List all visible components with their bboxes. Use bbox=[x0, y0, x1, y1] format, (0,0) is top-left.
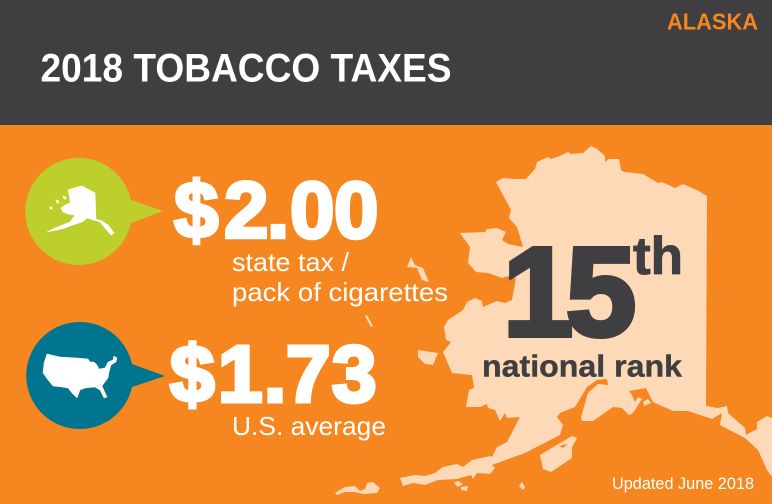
map: Alaska with rank bbox=[335, 146, 772, 495]
Alaska mainland bbox=[400, 146, 772, 486]
icon: Alaska silhouette bbox=[47, 186, 114, 235]
state tax caption: pack of cigarettes bbox=[232, 277, 448, 307]
state tax amount: $2.00 bbox=[174, 166, 378, 254]
icon: teal bubble bbox=[26, 322, 165, 429]
US average callout bbox=[26, 322, 386, 441]
rank label: national rank bbox=[482, 348, 683, 384]
state tax caption bbox=[232, 247, 448, 307]
US average amount: $1.73 bbox=[170, 330, 376, 418]
title: 2018 TOBACCO TAXES bbox=[40, 46, 452, 90]
icon: USA silhouette bbox=[43, 354, 117, 398]
other islands bbox=[335, 257, 651, 495]
update note: Updated June 2018 bbox=[612, 475, 754, 493]
rank suffix: th bbox=[633, 227, 683, 286]
header band bbox=[0, 0, 772, 125]
rank number: 15 bbox=[503, 222, 636, 362]
US average caption: U.S. average bbox=[232, 411, 386, 441]
state label: ALASKA bbox=[667, 8, 758, 34]
icon: lime bubble bbox=[25, 158, 163, 265]
state tax caption: state tax / bbox=[232, 247, 350, 277]
Kodiak island bbox=[540, 436, 577, 472]
state tax callout bbox=[25, 158, 448, 307]
